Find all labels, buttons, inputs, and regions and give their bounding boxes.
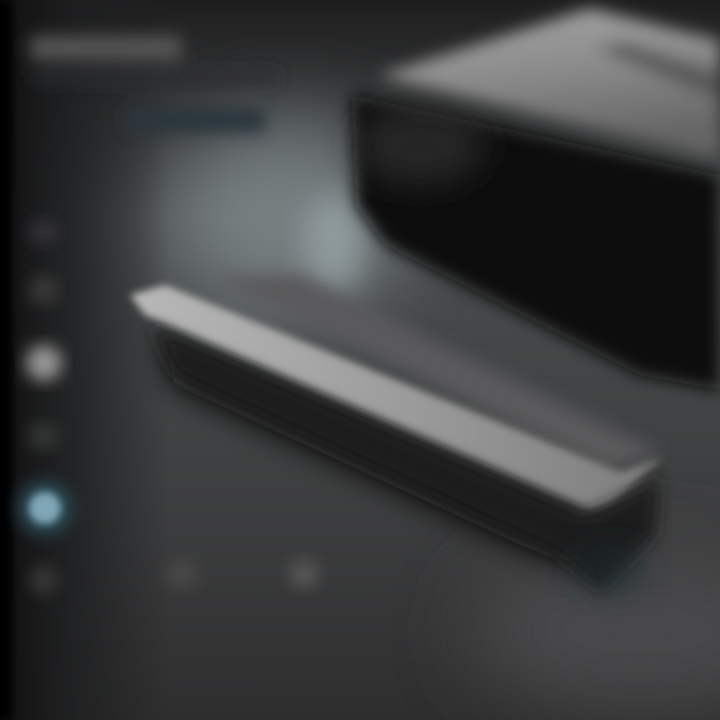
icon: blue dot	[18, 481, 72, 535]
panel: box top face	[378, 8, 720, 158]
icon list placeholder	[18, 220, 319, 594]
panel: soundbar body	[130, 275, 662, 596]
icon: light dot	[26, 345, 62, 381]
panel: box front face	[352, 95, 720, 390]
heading placeholder	[30, 36, 280, 132]
